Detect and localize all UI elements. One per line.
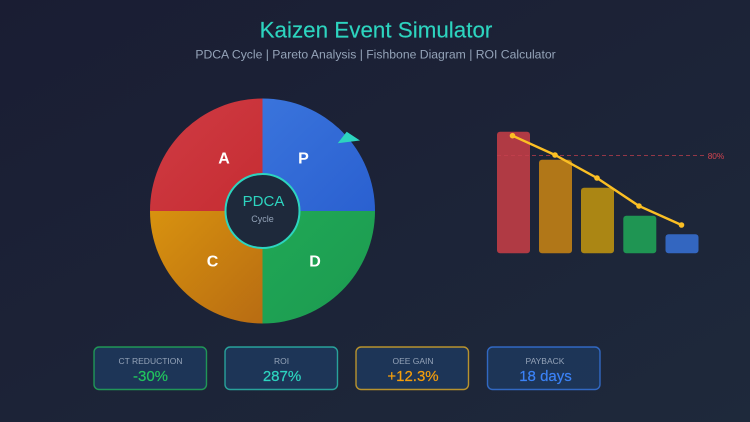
- card: OEE gain: OEE GAIN: [392, 356, 434, 366]
- card: CT reduction: CT REDUCTION: [118, 356, 183, 366]
- card: payback: 18 days: [519, 368, 572, 385]
- hub subtitle: Cycle: [251, 214, 274, 224]
- cumulative points: [510, 133, 684, 228]
- PDCA cycle wheel: [150, 98, 375, 324]
- card: CT reduction: -30%: [133, 368, 168, 385]
- title: Kaizen Event Simulator: [260, 18, 493, 42]
- card: OEE gain: +12.3%: [387, 368, 439, 385]
- segment: D: [262, 211, 375, 324]
- card: ROI: 287%: [263, 368, 301, 385]
- center hub: [226, 174, 300, 248]
- label: C: C: [207, 254, 219, 270]
- pareto chart: [497, 132, 725, 253]
- bar 3: [581, 188, 614, 253]
- segment: A: [150, 98, 262, 211]
- label: A: A: [218, 150, 230, 168]
- label: P: P: [298, 150, 309, 168]
- bar 1: [497, 132, 530, 253]
- 80% label: 80%: [708, 151, 725, 161]
- card: ROI: [225, 347, 338, 390]
- 80% threshold line: [497, 154, 705, 156]
- cumulative line: [512, 136, 682, 225]
- card: OEE gain: [356, 347, 468, 390]
- card: CT reduction: [94, 347, 206, 390]
- icon: cycle arrow: [338, 132, 360, 143]
- card: payback: [488, 347, 600, 390]
- bar 2: [539, 160, 572, 253]
- card: ROI: ROI: [274, 356, 289, 366]
- hub title: PDCA: [243, 193, 284, 210]
- label: D: D: [309, 254, 321, 270]
- segment: P: [262, 98, 375, 211]
- bar 4: [623, 216, 656, 253]
- bar 5: [666, 234, 698, 253]
- segment: C: [150, 211, 262, 324]
- subtitle: PDCA Cycle | Pareto Analysis | Fishbone Diagram | ROI Calculator: [195, 48, 556, 62]
- card: payback: PAYBACK: [526, 356, 565, 366]
